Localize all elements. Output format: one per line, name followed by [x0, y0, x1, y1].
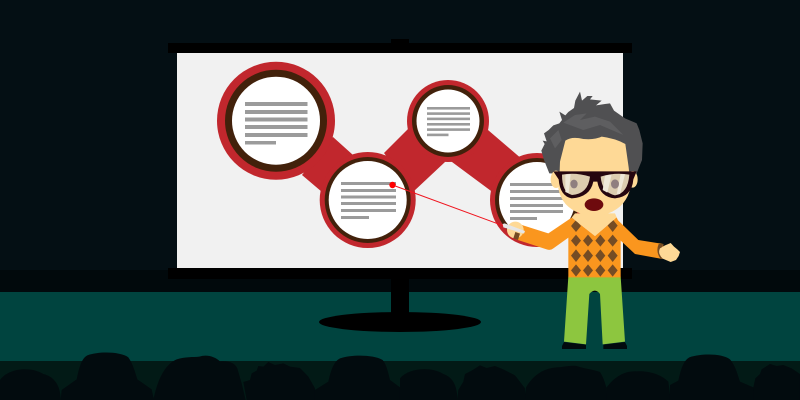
sweater: [568, 217, 621, 277]
projector screen: [168, 39, 632, 279]
right arm and hand: [615, 217, 680, 262]
node 2: [320, 152, 416, 248]
face: [551, 137, 638, 215]
presenter character: [503, 92, 680, 349]
glasses: [553, 171, 637, 198]
legs: [564, 277, 625, 344]
audience left group: [0, 352, 400, 400]
node 4: [490, 153, 584, 247]
laser pointer beam: [389, 182, 512, 229]
shoes: [562, 342, 627, 349]
hair: [541, 92, 643, 175]
pointing arm, hand and pen: [503, 218, 572, 250]
screen stand: [319, 279, 481, 332]
flow diagram: [217, 62, 584, 248]
connector bands: [302, 129, 530, 205]
node 1: [217, 62, 335, 180]
mouth: [585, 198, 603, 211]
neck: [572, 213, 617, 236]
audience right group: [400, 355, 800, 400]
node 3: [407, 80, 489, 162]
audience silhouettes: [0, 352, 800, 400]
